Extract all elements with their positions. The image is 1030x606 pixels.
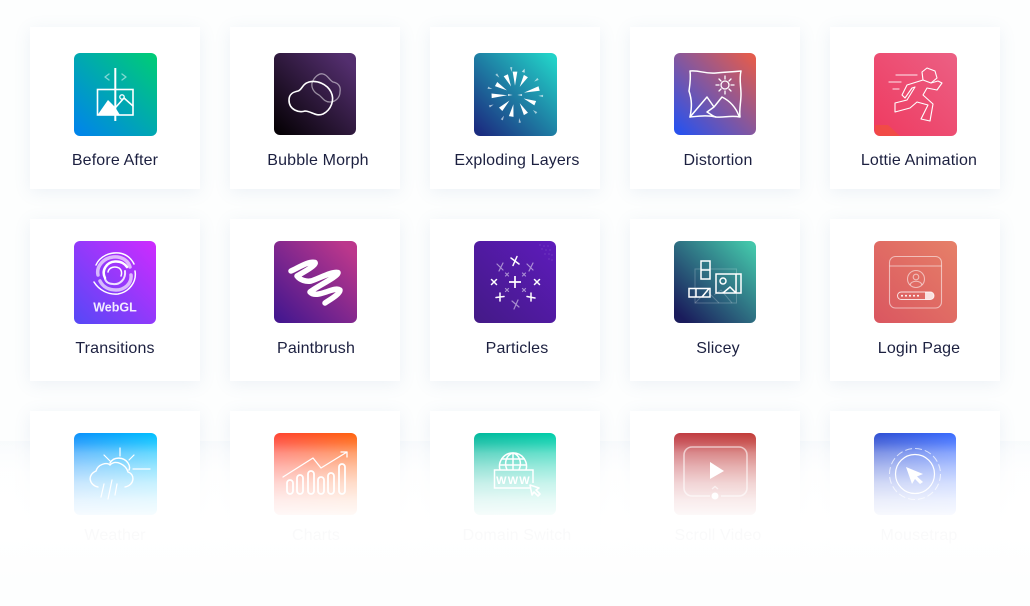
icon: particle crosses bbox=[474, 241, 556, 323]
card: Scroll Video bbox=[630, 411, 800, 573]
label: Paintbrush bbox=[277, 340, 355, 357]
icon: login window bbox=[874, 241, 957, 323]
icon: WebGL swirl: WebGL bbox=[93, 300, 137, 314]
label: Before After bbox=[72, 152, 158, 169]
background band behind the faded row bbox=[0, 441, 1030, 471]
label: Domain Switch bbox=[463, 527, 571, 544]
label: Mousetrap bbox=[881, 527, 957, 544]
icon: morphing blobs bbox=[274, 53, 356, 135]
icon: bar chart with arrow bbox=[274, 433, 357, 515]
icon: distorted picture bbox=[674, 53, 756, 135]
label: Distortion bbox=[683, 152, 753, 169]
label: Lottie Animation bbox=[861, 152, 977, 169]
icon: sliced picture bbox=[674, 241, 756, 323]
card: Login Page bbox=[830, 219, 1000, 381]
icon: globe and www bbox=[474, 433, 556, 515]
card: Paintbrush bbox=[230, 219, 400, 381]
card: Distortion bbox=[630, 27, 800, 189]
card: Exploding Layers bbox=[430, 27, 600, 189]
icon: before after image slider bbox=[74, 53, 157, 136]
label: Exploding Layers bbox=[454, 152, 580, 169]
label: Slicey bbox=[696, 340, 740, 357]
card: Particles bbox=[430, 219, 600, 381]
card: Weather bbox=[30, 411, 200, 573]
label: Scroll Video bbox=[675, 527, 761, 544]
label: Login Page bbox=[878, 340, 960, 357]
card: Bubble Morph bbox=[230, 27, 400, 189]
icon: running figure bbox=[874, 53, 957, 136]
card: Mousetrap bbox=[830, 411, 1000, 573]
icon: cursor in circle bbox=[874, 433, 956, 514]
icon: cloud and sun bbox=[74, 433, 157, 515]
card: Transitions bbox=[30, 219, 200, 381]
label: Charts bbox=[292, 527, 340, 544]
label: Transitions bbox=[75, 340, 155, 357]
icon: brush stroke bbox=[274, 241, 357, 323]
icon: WebGL swirl bbox=[74, 241, 156, 324]
card: Before After bbox=[30, 27, 200, 189]
icon: exploding wedges bbox=[474, 53, 557, 136]
card: Charts bbox=[230, 411, 400, 573]
label: Weather bbox=[84, 527, 146, 544]
label: Particles bbox=[486, 340, 548, 357]
label: Bubble Morph bbox=[267, 152, 369, 169]
card: Lottie Animation bbox=[830, 27, 1000, 189]
card: Slicey bbox=[630, 219, 800, 381]
icon: video player bbox=[674, 433, 756, 514]
icon: globe and www: WWW bbox=[496, 475, 531, 487]
card: Domain Switch bbox=[430, 411, 600, 573]
